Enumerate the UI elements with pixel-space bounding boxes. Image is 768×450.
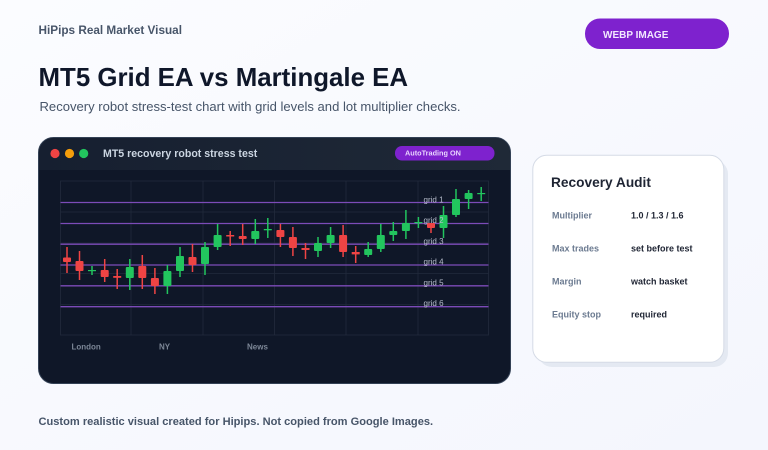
row: margin: watch basket <box>630 276 688 286</box>
session labels: London <box>72 342 101 352</box>
audit heading: Recovery Audit <box>551 175 651 190</box>
candles <box>63 187 485 294</box>
terminal header bar <box>39 138 510 170</box>
row: margin <box>552 276 688 286</box>
session labels: NY <box>159 342 171 352</box>
grid level labels: grid 2 <box>424 216 444 225</box>
row: equity stop: Equity stop <box>552 310 602 320</box>
row: max trades <box>552 244 693 254</box>
window buttons <box>50 149 88 158</box>
panel: recovery audit <box>533 155 728 367</box>
grid level lines <box>60 202 488 307</box>
row: multiplier <box>552 210 684 220</box>
row: max trades: set before test <box>631 244 693 254</box>
panel: trading terminal <box>38 138 510 384</box>
session labels <box>72 342 268 352</box>
badge: webp image: WEBP IMAGE <box>603 30 669 41</box>
grid level labels: grid 4 <box>424 258 444 266</box>
row: margin: Margin <box>552 276 582 286</box>
badge: webp image <box>585 18 729 49</box>
grid level labels: grid 5 <box>424 278 444 288</box>
brand label: HiPips Real Market Visual <box>38 24 182 37</box>
status pill: autotrading on <box>395 146 494 160</box>
candlestick chart <box>60 181 488 352</box>
grid level labels: grid 6 <box>424 299 444 308</box>
grid level labels <box>424 196 444 308</box>
grid level labels: grid 1 <box>424 196 444 204</box>
terminal title: MT5 recovery robot stress test <box>103 148 258 160</box>
row: max trades: Max trades <box>552 244 599 254</box>
chart grid <box>60 181 488 335</box>
title: MT5 Grid EA vs Martingale EA <box>38 64 408 92</box>
subtitle: Recovery robot stress-test chart with grid levels and lot multiplier checks. <box>40 99 461 114</box>
row: multiplier: 1.0 / 1.3 / 1.6 <box>631 210 684 220</box>
grid level labels: grid 3 <box>424 237 444 246</box>
footer note: Custom realistic visual created for Hipips. Not copied from Google Images. <box>38 416 433 428</box>
row: equity stop: required <box>631 310 667 320</box>
row: equity stop <box>552 310 667 320</box>
session labels: News <box>247 342 268 352</box>
row: multiplier: Multiplier <box>552 210 592 220</box>
status pill: autotrading on: AutoTrading ON <box>405 148 461 158</box>
